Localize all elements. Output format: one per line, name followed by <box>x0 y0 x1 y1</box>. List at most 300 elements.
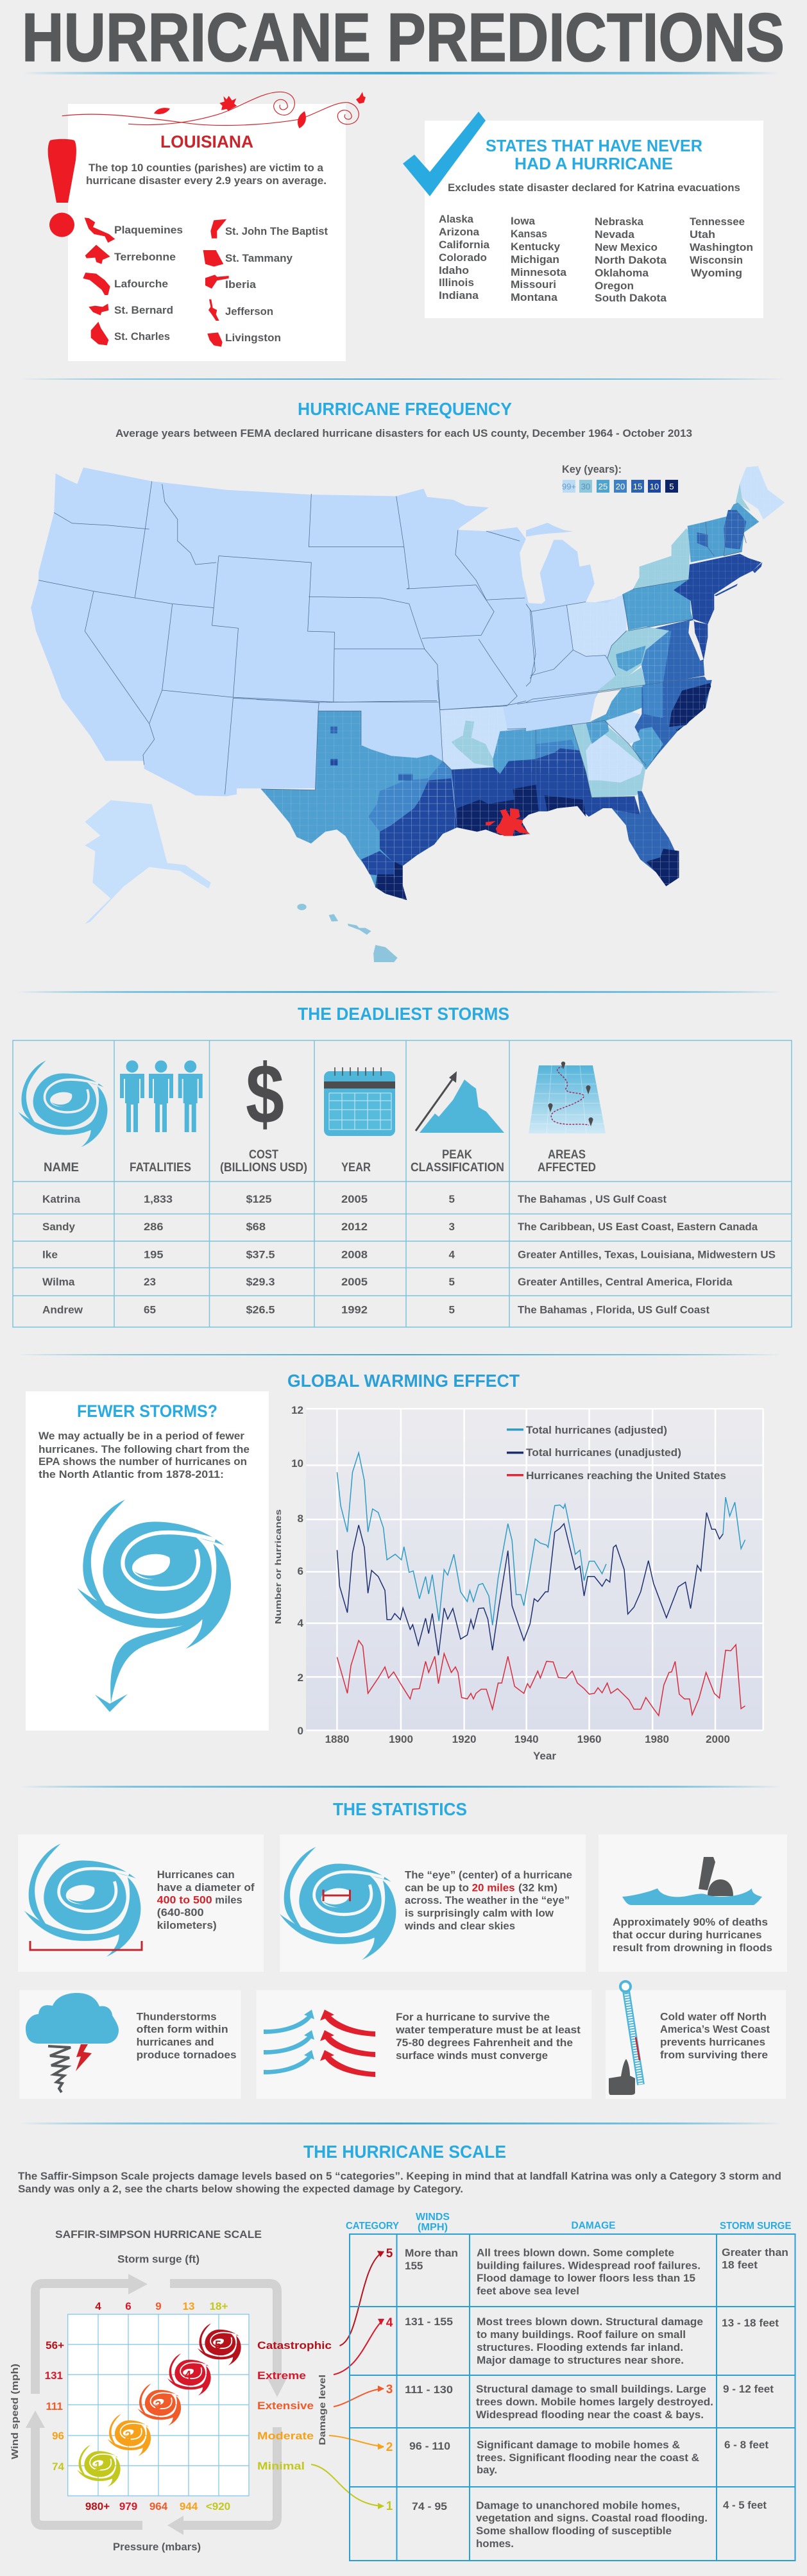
row: category 4: structures. Flooding extends far inland. <box>477 2341 683 2353</box>
text block: across. The weather in the “eye” <box>405 1894 570 1906</box>
swirl category 2 <box>108 2414 151 2456</box>
table row: Katrina: 2005 <box>341 1193 368 1205</box>
chart y axis labels: 4 <box>298 1617 304 1629</box>
row: category 1: vegetation and signs. Coastal road flooding. <box>476 2512 708 2524</box>
row: category 1: Some shallow flooding of susceptible <box>476 2525 672 2537</box>
list: states column 4: Wyoming <box>691 267 742 279</box>
chart x axis labels <box>325 1733 730 1745</box>
swirl category 1: 1 <box>94 2460 101 2473</box>
list: states column 1: Arizona <box>439 226 480 238</box>
text block: America’s West Coast <box>660 2023 770 2035</box>
text block: often form within <box>137 2023 228 2035</box>
table row: Andrew: 1992 <box>341 1303 368 1316</box>
text block: fewer storms: EPA shows the number of hurricanes on <box>38 1455 247 1468</box>
decorative red swirl and leaves <box>62 92 366 128</box>
row: category 4: to many buildings. Roof failure on small <box>477 2328 686 2341</box>
heading: deadliest storms: THE DEADLIEST STORMS <box>298 1004 509 1024</box>
storm surge numbers: 13 <box>183 2300 194 2312</box>
list: states column 1 <box>439 213 490 301</box>
row: category 5: Greater than <box>722 2246 788 2258</box>
list: states column 3: Nebraska <box>595 216 644 228</box>
row: category 2: bay. <box>477 2464 497 2476</box>
table header: CATEGORY <box>346 2221 399 2232</box>
heading: states <box>486 136 702 173</box>
damage level labels <box>257 2339 332 2472</box>
wind speed numbers <box>45 2339 65 2473</box>
wind speed numbers: 74 <box>52 2461 65 2473</box>
text block: parish names: Livingston <box>225 332 281 344</box>
table row: Wilma <box>42 1276 733 1288</box>
icon: thermometer and thumb <box>609 1981 641 2095</box>
chart y axis labels: 6 <box>298 1565 303 1577</box>
legend: frequency key: 15 <box>633 482 642 491</box>
text block: parish names: Iberia <box>225 278 257 291</box>
row: category 5: 155 <box>405 2260 423 2272</box>
row: category 2 <box>409 2439 769 2476</box>
text block: 75-80 degrees Fahrenheit and the <box>396 2037 573 2049</box>
list: states column 2 <box>511 215 567 303</box>
icon: swirl with bracket <box>24 1843 142 1956</box>
text block: fewer storms: the North Atlantic from 1878-2011: <box>38 1468 224 1480</box>
panel: water temperature <box>257 1990 591 2099</box>
damage level labels: Moderate <box>257 2430 314 2442</box>
row: category 5: feet above sea level <box>477 2285 579 2297</box>
table row: Ike <box>42 1248 776 1261</box>
table row: Ike: 195 <box>144 1248 163 1261</box>
table header row: FATALITIES <box>130 1161 191 1174</box>
storm surge numbers <box>95 2300 228 2312</box>
list: states column 4: Tennessee <box>690 216 745 228</box>
category numbers: 2 <box>386 2441 393 2454</box>
icon: calendar <box>324 1067 395 1136</box>
icon: hurricane swirl <box>18 1060 107 1147</box>
table row: Wilma: 5 <box>449 1276 455 1288</box>
table row: Wilma: 23 <box>144 1276 156 1288</box>
swirl category 3: 3 <box>155 2399 162 2412</box>
legend: frequency key: 99+ <box>562 482 576 491</box>
category numbers: 4 <box>386 2316 393 2330</box>
text block: surface winds must converge <box>396 2049 548 2062</box>
table row: Andrew: Andrew <box>42 1303 83 1316</box>
row: category 1: homes. <box>476 2538 514 2550</box>
row: category 3: 9 - 12 feet <box>723 2383 774 2395</box>
row: category 2: trees. Significant flooding near the coast & <box>477 2452 699 2464</box>
table row: Sandy: $68 <box>246 1221 266 1233</box>
legend: frequency key: 25 <box>599 482 607 491</box>
row: category 5 <box>405 2246 788 2297</box>
chart y axis labels: 0 <box>298 1725 303 1737</box>
text block: fewer storms: hurricanes. The following chart from the <box>38 1443 250 1455</box>
text block: For a hurricane to survive the <box>396 2011 550 2023</box>
axis label: pressure: Pressure (mbars) <box>113 2541 201 2553</box>
table row: Andrew: $26.5 <box>246 1303 275 1316</box>
subtitle: hurricane frequency: Average years between FEMA declared hurricane disasters for each US county, December 1964 - October 2013 <box>115 427 692 439</box>
text block: parish names <box>114 224 328 344</box>
table row: Sandy: Sandy <box>42 1221 76 1233</box>
table: hurricane categories <box>346 2212 795 2561</box>
swirl category 5: 5 <box>215 2339 221 2351</box>
damage level labels: Extensive <box>257 2400 314 2412</box>
icon: drowning swimmer <box>622 1857 762 1905</box>
list: states column 4 <box>690 216 753 279</box>
icon: dollar sign: $ <box>246 1047 284 1141</box>
heading: Louisiana: LOUISIANA <box>160 132 253 151</box>
legend: frequency key: Key (years): <box>562 463 622 475</box>
text block <box>137 2011 237 2061</box>
storm surge numbers: 9 <box>155 2300 162 2312</box>
text block: Saffir-Simpson intro: The Saffir-Simpson Scale projects damage levels based on 5 “categories”. Keeping in mind that at landfall Katrina was only a Category 3 storm and <box>18 2170 781 2182</box>
panel: drowning <box>599 1835 787 1972</box>
chart legend: Total hurricanes (unadjusted) <box>526 1446 681 1459</box>
list: states column 2: Kentucky <box>511 241 561 253</box>
list: states column 3: New Mexico <box>595 241 658 253</box>
text block: fewer storms <box>38 1430 250 1480</box>
note: Katrina exclusion: Excludes state disaster declared for Katrina evacuations <box>448 182 740 194</box>
category numbers <box>386 2247 393 2513</box>
list: states column 3: Oregon <box>595 280 634 292</box>
pressure numbers <box>85 2500 230 2512</box>
text block: parish names: St. Bernard <box>114 304 173 316</box>
legend: frequency key <box>562 463 678 493</box>
table row: Ike: 2008 <box>341 1248 368 1261</box>
line: total hurricanes adjusted <box>337 1453 606 1625</box>
chart x axis labels: 1960 <box>577 1733 602 1745</box>
icon: peak classification <box>416 1071 504 1133</box>
text block: parish names: Lafourche <box>114 278 168 290</box>
text block: result from drowning in floods <box>613 1942 772 1954</box>
text block: parish names: St. Charles <box>114 330 170 343</box>
damage level labels: Extreme <box>257 2369 306 2382</box>
text block: from surviving there <box>660 2049 768 2061</box>
text block: parish names: Plaquemines <box>114 224 183 236</box>
heading: states: STATES THAT HAVE NEVER <box>486 136 702 155</box>
table header row: CLASSIFICATION <box>411 1161 504 1174</box>
swirl category 3 <box>138 2384 181 2426</box>
heading: fewer storms: FEWER STORMS? <box>77 1402 217 1421</box>
table header row: AFFECTED <box>538 1161 596 1174</box>
chart y axis labels: 12 <box>291 1404 303 1416</box>
text block: The “eye” (center) of a hurricane <box>405 1869 572 1881</box>
row: category 5: Flood damage to lower floors less than 15 <box>477 2272 695 2284</box>
table: deadliest storms <box>13 1040 792 1327</box>
list: states column 1: Colorado <box>439 251 487 264</box>
text block: parish names: Jefferson <box>225 305 273 318</box>
swirl category 5 <box>198 2323 241 2366</box>
category numbers: 3 <box>386 2383 393 2396</box>
row: category 2: 6 - 8 feet <box>724 2439 769 2451</box>
text block: top 10 counties: The top 10 counties (parishes) are victim to a <box>89 162 324 174</box>
text block: Approximately 90% of deaths <box>613 1916 768 1928</box>
row: category 5: All trees blown down. Some complete <box>477 2247 674 2259</box>
legend: frequency key: 30 <box>581 482 590 491</box>
list: states column 2: Minnesota <box>511 266 567 278</box>
chart x axis labels: 1920 <box>452 1733 477 1745</box>
chart legend: Hurricanes reaching the United States <box>526 1470 726 1482</box>
table row: Sandy <box>42 1221 758 1233</box>
table row: Katrina: 5 <box>449 1193 455 1205</box>
row: category 2: 96 - 110 <box>409 2440 450 2452</box>
text block: hurricanes and <box>137 2036 214 2048</box>
map inset: Alaska <box>85 801 211 924</box>
list: states column 3 <box>595 216 667 304</box>
pressure numbers: 944 <box>180 2500 198 2512</box>
text block: Saffir-Simpson intro: Sandy was only a 2, see the charts below showing the expected damage by Category. <box>18 2183 463 2195</box>
table row: Sandy: 2012 <box>341 1221 368 1233</box>
text block <box>660 2011 770 2061</box>
table row: Andrew: 5 <box>449 1303 455 1316</box>
list: states column 1: Indiana <box>439 289 479 301</box>
grid <box>68 2314 249 2496</box>
row: category 5: building failures. Widespread roof failures. <box>477 2259 701 2271</box>
row: category 3: 111 - 130 <box>405 2384 453 2396</box>
heading: global warming effect: GLOBAL WARMING EFFECT <box>287 1371 520 1391</box>
wind speed numbers: 131 <box>45 2369 63 2382</box>
table header: STORM SURGE <box>720 2221 792 2232</box>
chart: number of hurricanes 1880-2010 <box>273 1404 763 1762</box>
icons: parish silhouettes <box>83 217 229 347</box>
table header row: YEAR <box>341 1161 371 1174</box>
row: category 2: Significant damage to mobile homes & <box>477 2439 680 2451</box>
damage level labels: Catastrophic <box>257 2339 332 2351</box>
row: category 4: Major damage to structures near shore. <box>477 2354 684 2366</box>
axis label: wind speed: Wind speed (mph) <box>10 2364 21 2459</box>
list: states column 2: Kansas <box>511 228 547 240</box>
chart title: SAFFIR-SIMPSON HURRICANE SCALE <box>55 2228 262 2241</box>
table row: Katrina: The Bahamas , US Gulf Coast <box>518 1193 667 1205</box>
text block: prevents hurricanes <box>660 2036 765 2048</box>
table row: Ike: Greater Antilles, Texas, Louisiana, Midwestern US <box>518 1248 776 1261</box>
chart y axis labels: 10 <box>291 1457 303 1470</box>
icon: areas affected map <box>529 1062 606 1133</box>
panel: thunderstorms <box>19 1990 241 2099</box>
wind speed numbers: 56+ <box>46 2339 64 2351</box>
heading: the hurricane scale: THE HURRICANE SCALE <box>303 2142 506 2162</box>
wind speed numbers: 111 <box>46 2400 63 2412</box>
text block: is surprisingly calm with low <box>405 1907 554 1919</box>
row: category 3: Structural damage to small buildings. Large <box>476 2383 706 2395</box>
table header: (MPH) <box>418 2222 448 2233</box>
table row: Katrina: 1,833 <box>144 1193 173 1205</box>
text block: have a diameter of <box>157 1881 255 1894</box>
table row: Sandy: 3 <box>449 1221 455 1233</box>
text block: that occur during hurricanes <box>613 1929 762 1941</box>
text block: Thunderstorms <box>137 2011 217 2023</box>
map inset: Hawaii <box>297 904 398 962</box>
text block: kilometers) <box>157 1919 217 1931</box>
table header row <box>44 1148 596 1174</box>
icon: swirl with arrow tail <box>77 1500 231 1712</box>
text block: parish names: St. John The Baptist <box>225 225 328 237</box>
pressure numbers: <920 <box>206 2500 230 2512</box>
axis label: damage level: Damage level <box>317 2375 327 2445</box>
list: states column 4: Washington <box>690 241 753 253</box>
text block <box>613 1916 772 1954</box>
text block <box>404 1869 572 1932</box>
connector arrows to categories <box>311 2251 384 2509</box>
icon: cloud tornado lightning <box>26 1993 119 2092</box>
swirl category 1 <box>77 2445 121 2487</box>
chart x axis labels: 1880 <box>325 1733 349 1745</box>
list: states column 1: California <box>439 239 490 251</box>
text block: fewer storms: We may actually be in a period of fewer <box>38 1430 244 1442</box>
storm surge numbers: 18+ <box>210 2300 228 2312</box>
chart x axis labels: 2000 <box>706 1733 730 1745</box>
line: total hurricanes unadjusted <box>337 1513 723 1656</box>
text block: Cold water off North <box>660 2011 767 2023</box>
table header row: (BILLIONS USD) <box>220 1161 307 1174</box>
table header row: AREAS <box>548 1148 586 1162</box>
panel: fewer storms <box>26 1391 269 1731</box>
text block: can be up to <box>405 1882 469 1894</box>
list: states column 2: Michigan <box>511 253 559 266</box>
line: hurricanes reaching the United States <box>337 1641 745 1716</box>
table row: Ike: $37.5 <box>246 1248 275 1261</box>
table header row: PEAK <box>442 1148 472 1162</box>
table row: Katrina <box>42 1193 667 1205</box>
swirl category 4: 4 <box>185 2369 191 2382</box>
row: category 3: trees down. Mobile homes largely destroyed. <box>476 2396 713 2408</box>
row: category 4: 13 - 18 feet <box>722 2317 779 2329</box>
legend: frequency key: 5 <box>669 482 674 491</box>
list: states column 1: Illinois <box>439 276 474 289</box>
pressure numbers: 979 <box>119 2500 137 2512</box>
row: category 1: Damage to unanchored mobile homes, <box>476 2500 680 2512</box>
table row: Ike: Ike <box>42 1248 58 1261</box>
list: states column 4: Utah <box>690 228 715 241</box>
table header row: NAME <box>44 1161 79 1174</box>
row: category 5: 18 feet <box>722 2259 758 2271</box>
heading: the statistics: THE STATISTICS <box>333 1799 467 1819</box>
table header: WINDS <box>416 2212 450 2223</box>
heading: states: HAD A HURRICANE <box>514 154 673 173</box>
chart legend <box>507 1424 726 1482</box>
row: category 1 <box>412 2499 767 2550</box>
row: category 4 <box>405 2316 779 2366</box>
row: category 4: Most trees blown down. Structural damage <box>477 2316 703 2328</box>
map highlight: Louisiana top parishes <box>496 808 530 836</box>
text block: 20 miles <box>472 1882 515 1894</box>
axis label: storm surge: Storm surge (ft) <box>117 2253 200 2266</box>
chart legend: Total hurricanes (adjusted) <box>526 1424 667 1436</box>
pressure numbers: 980+ <box>85 2500 110 2512</box>
legend: frequency key: 20 <box>616 482 625 491</box>
chart y axis labels: 2 <box>298 1672 303 1684</box>
swirl category 4 <box>167 2353 211 2396</box>
category numbers: 5 <box>386 2247 393 2260</box>
row: category 3 <box>405 2383 774 2421</box>
table row: Sandy: 286 <box>144 1221 163 1233</box>
list: states column 2: Missouri <box>511 278 556 291</box>
map: south and gulf regions <box>257 680 712 962</box>
table row: Sandy: The Caribbean, US East Coast, Eastern Canada <box>518 1221 758 1233</box>
arrows: grey cycle around grid <box>26 2274 287 2535</box>
text block: miles <box>215 1894 242 1906</box>
table row: Wilma: $29.3 <box>246 1276 275 1288</box>
panel: states that have never had a hurricane <box>403 112 763 318</box>
text block: Saffir-Simpson intro <box>18 2170 781 2195</box>
text block: winds and clear skies <box>404 1920 515 1932</box>
legend: frequency key: 10 <box>650 482 659 491</box>
map: north east regions <box>526 466 785 731</box>
table header <box>346 2212 792 2233</box>
list: states column 1: Alaska <box>439 213 474 225</box>
icon: converging wind arrows <box>264 2010 375 2077</box>
icon: three people <box>120 1060 203 1132</box>
map: US counties hurricane frequency <box>31 463 785 962</box>
icon: swirl with eye marker <box>280 1847 396 1960</box>
swirl category 2: 2 <box>124 2430 132 2443</box>
storm surge numbers: 4 <box>95 2300 101 2312</box>
wind speed numbers: 96 <box>52 2430 64 2442</box>
text block: Hurricanes can <box>157 1868 235 1881</box>
category numbers: 1 <box>386 2500 393 2513</box>
panel: hurricane eye <box>280 1835 586 1972</box>
row: category 4: 131 - 155 <box>405 2316 453 2328</box>
storm surge numbers: 6 <box>125 2300 132 2312</box>
chart: Saffir-Simpson hurricane scale <box>10 2228 384 2553</box>
table row: Wilma: Greater Antilles, Central America, Florida <box>518 1276 733 1288</box>
text block: parish names: Terrebonne <box>114 251 176 263</box>
text block: top 10 counties <box>86 162 327 187</box>
text block: 400 to 500 <box>157 1894 212 1906</box>
row: category 1: 74 - 95 <box>412 2500 447 2512</box>
damage level labels: Minimal <box>257 2460 305 2472</box>
table header: DAMAGE <box>571 2221 616 2231</box>
row: category 5: More than <box>405 2247 458 2259</box>
icon: exclamation mark <box>48 139 76 237</box>
list: states column 1: Idaho <box>439 264 469 276</box>
panel: Louisiana <box>48 92 366 361</box>
panel: hurricane diameter <box>18 1835 264 1972</box>
text block: water temperature must be at least <box>395 2024 581 2036</box>
text block <box>157 1868 255 1931</box>
text block: parish names: St. Tammany <box>225 252 293 264</box>
list: states column 3: Oklahoma <box>595 267 649 279</box>
text block: (32 km) <box>518 1882 557 1894</box>
list: states column 2: Montana <box>511 291 558 303</box>
row: category 3: Widespread flooding near the coast & bays. <box>476 2409 704 2421</box>
table row: Ike: 4 <box>449 1248 455 1261</box>
table row: Katrina: $125 <box>246 1193 272 1205</box>
table row: Andrew: 65 <box>144 1303 156 1316</box>
text block: (640-800 <box>157 1906 204 1919</box>
map: state borders <box>38 481 620 794</box>
list: states column 3: Nevada <box>595 228 635 241</box>
list: states column 2: Iowa <box>511 215 536 227</box>
chart x axis title: Year <box>533 1750 556 1762</box>
chart y axis labels: 8 <box>298 1513 303 1525</box>
text block: produce tornadoes <box>137 2049 237 2061</box>
chart y axis labels <box>291 1404 304 1737</box>
chart x axis labels: 1900 <box>389 1733 413 1745</box>
list: states column 4: Wisconsin <box>690 254 743 266</box>
heading: hurricane frequency: HURRICANE FREQUENCY <box>298 399 512 419</box>
pressure numbers: 964 <box>149 2500 168 2512</box>
panel: cold water <box>606 1981 786 2099</box>
table row: Katrina: Katrina <box>42 1193 81 1205</box>
list: states column 3: North Dakota <box>595 254 667 266</box>
text block: top 10 counties: hurricane disaster every 2.9 years on average. <box>86 174 327 187</box>
list: states column 3: South Dakota <box>595 292 667 304</box>
chart x axis labels: 1980 <box>645 1733 669 1745</box>
row: category 1: 4 - 5 feet <box>723 2499 767 2511</box>
chart y axis title: Number or hurricanes <box>273 1509 283 1624</box>
table row: Andrew: The Bahamas , Florida, US Gulf Coast <box>518 1303 709 1316</box>
text block <box>395 2011 581 2062</box>
chart x axis labels: 1940 <box>514 1733 539 1745</box>
icon: check mark <box>403 112 486 196</box>
table row: Wilma: 2005 <box>341 1276 368 1288</box>
